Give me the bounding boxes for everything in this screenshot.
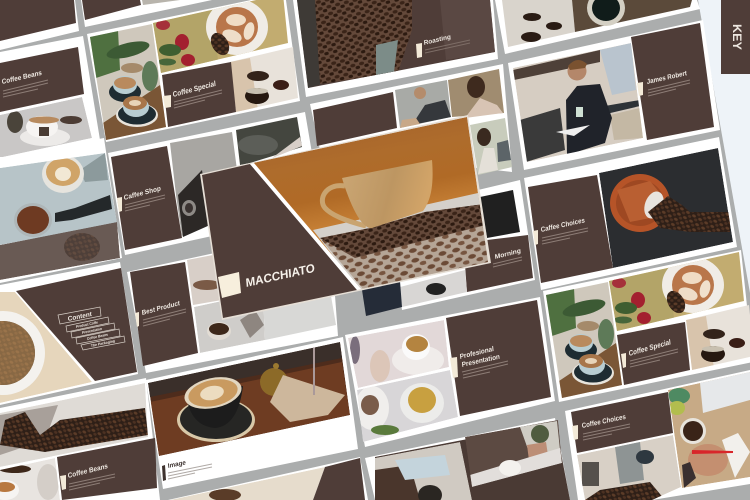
keyboard [700,372,750,413]
brown panel [162,62,236,127]
heading: Coffee Beans [67,462,108,480]
tab [637,82,643,96]
slide: bottom centre [168,457,368,500]
item: the packaging: The Packaging [91,339,115,348]
photo: cream table [170,467,325,500]
tab [621,353,626,368]
tab [60,475,66,490]
brown panel [313,92,397,146]
contents list [58,307,125,350]
slide: professional presentation [345,297,555,447]
photo: latte bottom [355,370,458,442]
slide: top-left fragment [0,0,79,50]
tab [163,95,171,108]
brown panel [571,392,673,453]
heading line two: Presentation [461,353,500,369]
slide: coffee beans lower [0,378,160,500]
slide: coffee special lower [543,250,750,403]
heading: content: Content [68,311,93,323]
heading: Coffee Special [172,79,216,99]
brown panel [313,458,365,500]
heading: Morning [495,248,521,261]
cup body [342,160,433,228]
cream tab [218,272,241,298]
brown panel [111,146,182,250]
photo: coffee shop table [465,420,562,487]
tab [416,43,422,58]
heading: James Robert [647,70,688,86]
photo: barista [513,43,643,162]
diagonal white line [250,163,361,290]
slide: morning [362,180,535,316]
slide: best product [127,254,338,373]
item: coffee beans: Coffee Beans [87,333,108,341]
slide: roasting [293,0,498,97]
photo: dark table [236,117,302,165]
slide: image [146,337,358,489]
tab [450,357,458,378]
brown panel [57,438,157,500]
brown panel [617,322,690,385]
brown panel [631,23,714,140]
item: presentation: Presentation [82,327,102,335]
photo: cups [187,255,222,305]
tag: KEY: KEY [730,24,742,50]
brown panel [0,47,84,112]
title: MACCHIATO [245,261,315,290]
photo: counter [263,290,336,340]
photo: dark left [362,281,402,316]
slide: glasses and coffee cup [495,0,700,54]
brown panel [130,262,198,366]
photo: woman [448,69,504,117]
slide: people [310,64,512,175]
heading: Coffee Special [628,337,671,358]
heading: Coffee Beans [1,69,42,86]
photo: dark room [480,190,520,238]
slide: coffee special top [87,0,300,145]
slide: caffee choices [524,137,737,290]
slide: coffee shop [108,112,322,255]
photo: spilled cup [599,148,733,268]
photo: coffee grinder [170,132,237,237]
brown overlay panel [0,222,120,280]
brown panel [465,235,533,292]
heading: Best Product [142,300,181,317]
brown panel [528,175,613,283]
heading: Image [168,459,187,470]
photo: latte and bell [148,342,350,456]
tab [117,197,122,212]
brown panel [446,300,551,416]
brown panel [202,164,357,318]
photo: black coffee [572,0,692,32]
tag: KEY [721,0,750,74]
heading: Coffee Choices [581,413,626,430]
photo: beans in roaster [297,0,495,88]
slide: coffee beans [0,36,101,168]
photo: cup on table [0,97,92,157]
cup handle [322,186,366,226]
hero photo: steaming cup on beans [253,117,492,292]
slide: coffee choices lower [565,370,750,500]
slide: top second fragment [81,0,212,27]
photo: scattered beans [0,383,148,467]
photo: latte top [348,320,449,388]
slide: bottom shop [365,418,570,500]
slide: james robert [508,20,720,170]
heading: Caffee Shop [124,185,161,202]
photo: man [395,80,451,128]
brown panel [16,268,137,381]
photo: cup on table [400,270,467,307]
item: product coffe: Product Coffe [76,320,98,329]
heading: Caffee Choices [540,216,585,234]
tab [533,230,538,245]
tab [135,312,139,327]
photo: white cup [0,458,60,500]
photo collage [544,252,750,403]
photo: pouring [375,442,472,500]
hero title card [200,115,492,320]
heading: Roasting [424,34,451,47]
photo collage [88,0,298,145]
photo: woman with laptop [470,118,512,175]
slide: content [0,262,138,405]
photo: bowl [194,302,265,353]
dark tab [162,465,166,481]
photo: glasses [502,0,575,47]
slide: espresso portafilters [0,138,122,283]
photo: portafilters [0,153,117,245]
heading: Profesional [459,345,494,361]
tab [572,425,578,440]
photo: bowl of beans [0,292,92,403]
photo: pour over [577,435,681,500]
photo: desk with keyboard [668,372,750,488]
